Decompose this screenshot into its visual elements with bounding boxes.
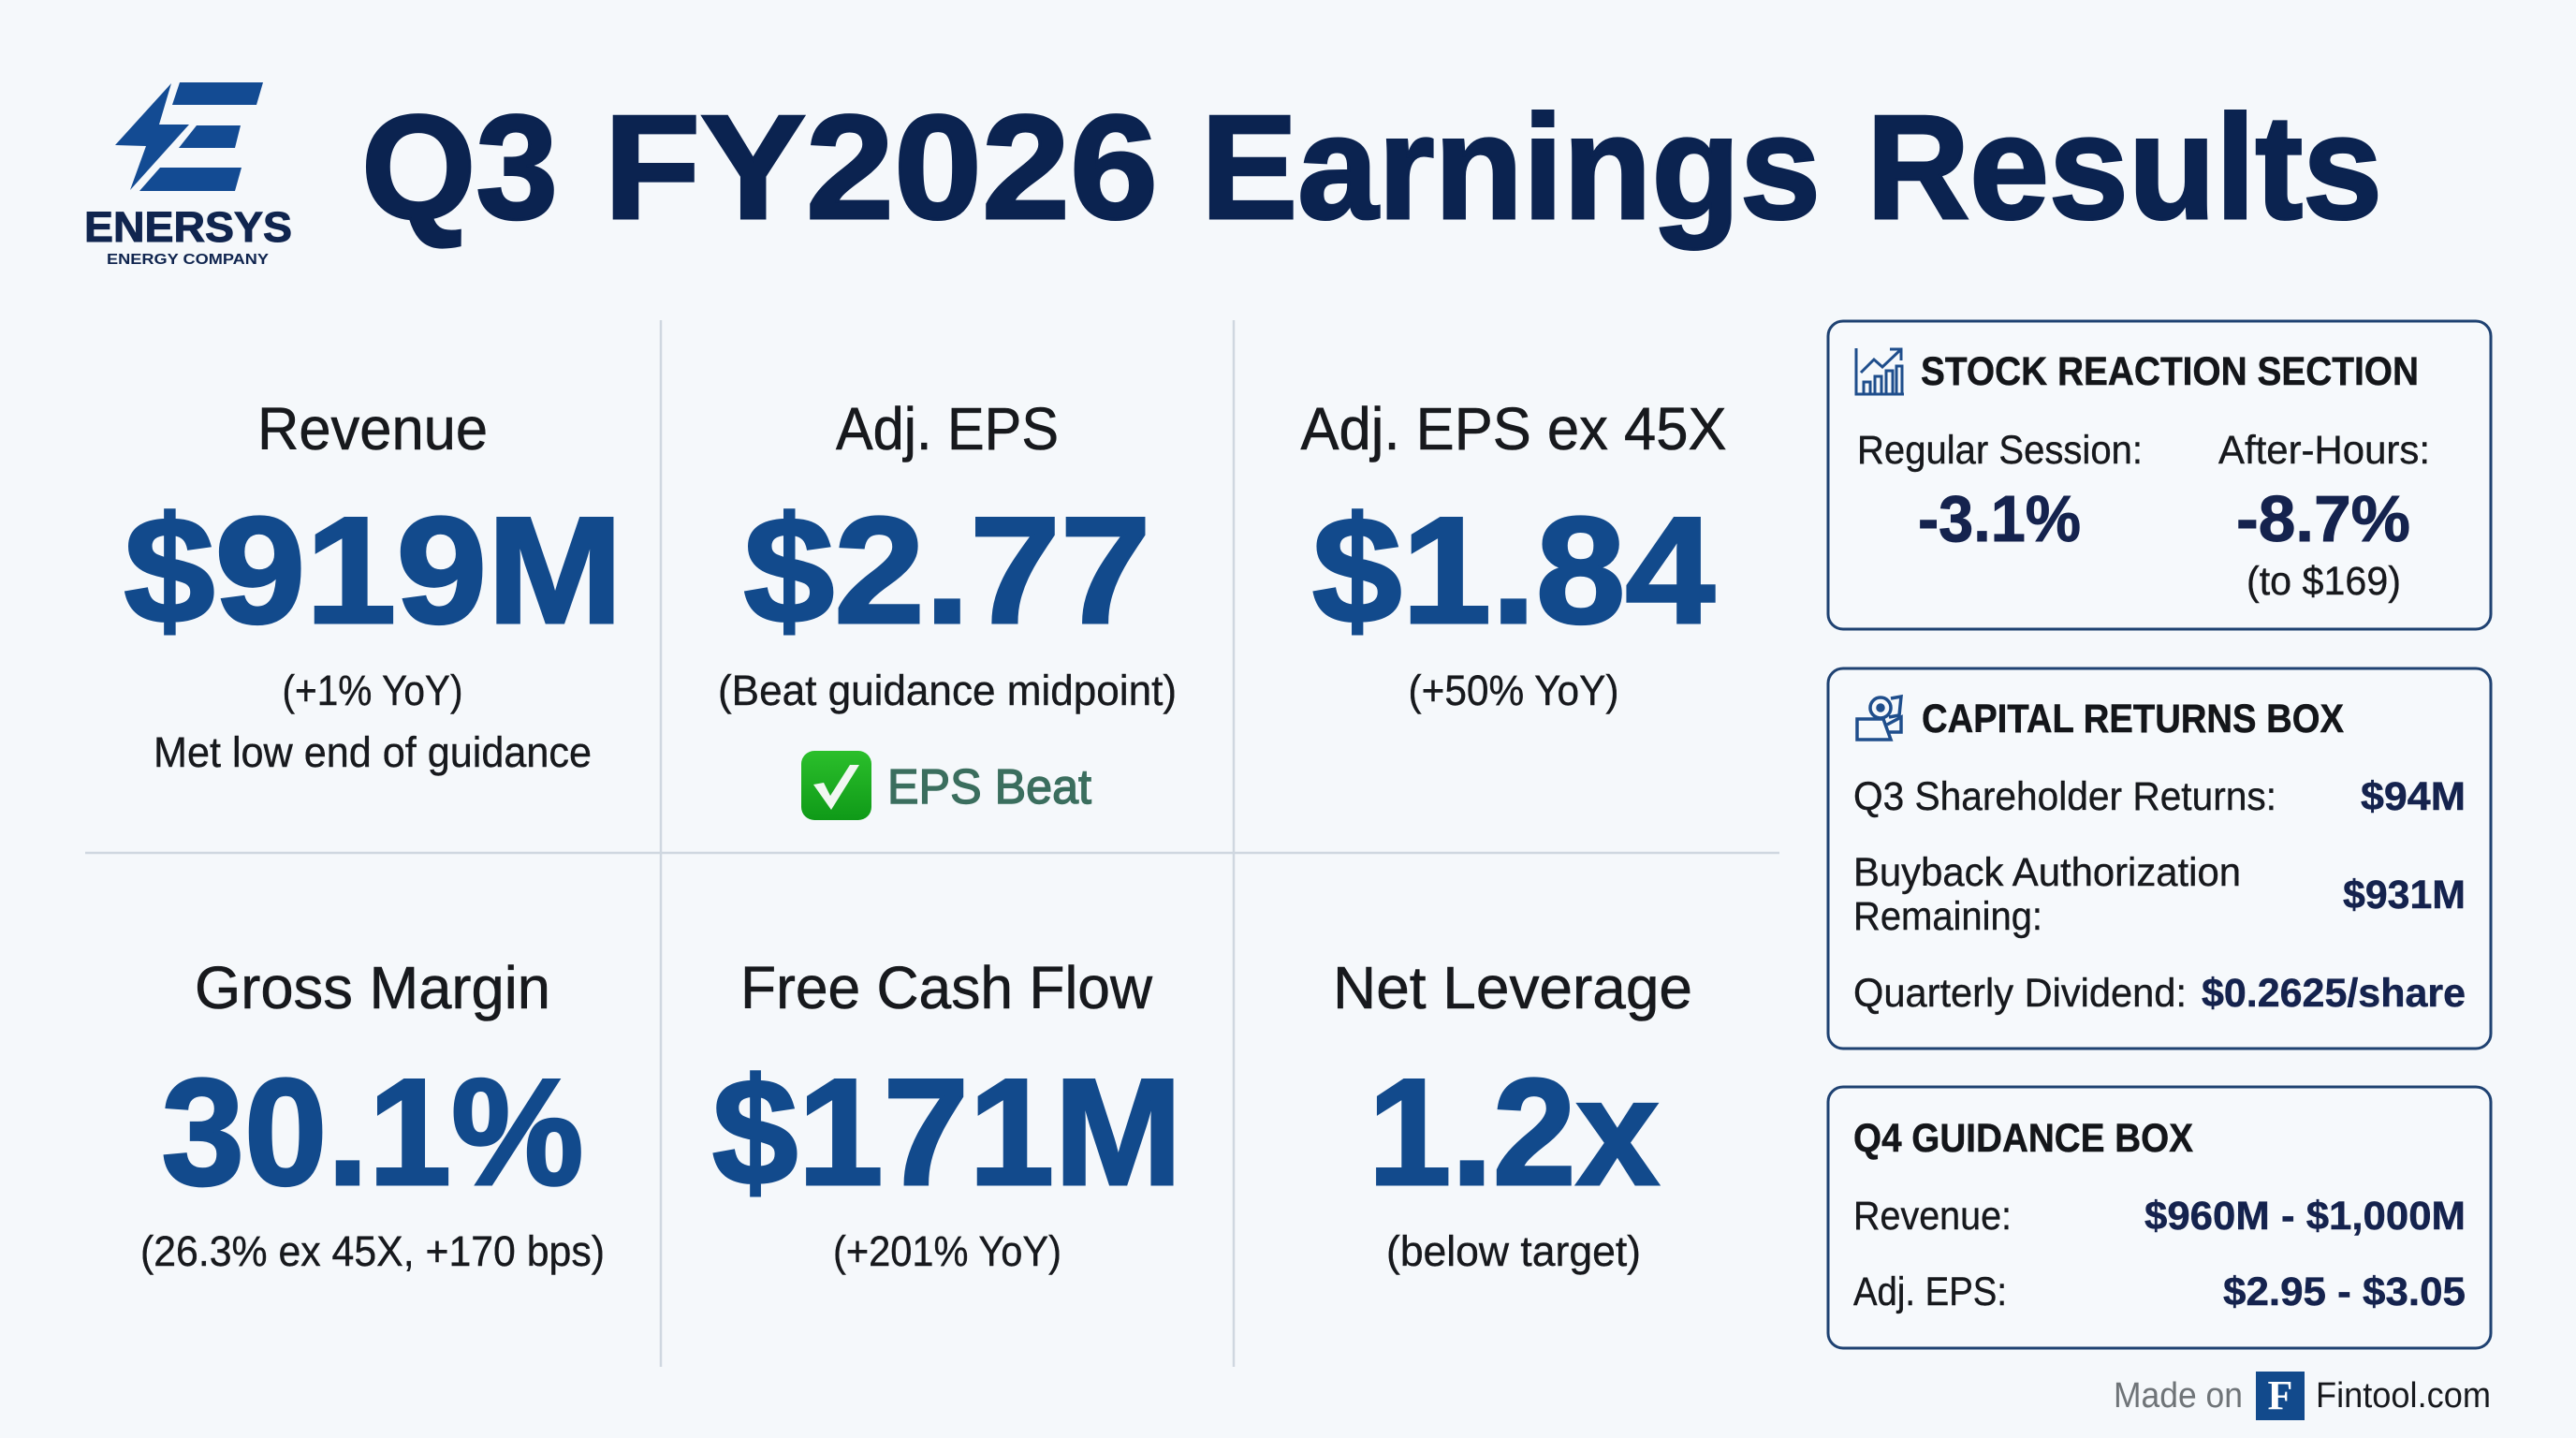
after-hours price: (to $169) xyxy=(2247,559,2401,604)
net leverage value: 1.2x xyxy=(1368,1048,1659,1217)
title: Q3 xyxy=(361,85,558,250)
free cash flow value: $171M xyxy=(712,1048,1182,1217)
footer: Fintool credit xyxy=(2114,1372,2491,1420)
icon: lightning E mark xyxy=(115,82,263,191)
panel: free cash flow metric xyxy=(712,954,1182,1275)
adjusted EPS value: $2.77 xyxy=(743,486,1151,655)
stock reaction heading: STOCK REACTION SECTION xyxy=(1921,349,2419,394)
buyback label xyxy=(1853,850,2241,939)
EPS beat badge text: EPS Beat xyxy=(887,760,1092,814)
guidance revenue label: Revenue: xyxy=(1853,1194,2012,1239)
dividend value: $0.2625/share xyxy=(2202,971,2466,1016)
Fintool.com text: Fintool.com xyxy=(2316,1376,2491,1416)
revenue label: Revenue xyxy=(257,395,488,462)
gross margin note: (26.3% ex 45X, +170 bps) xyxy=(140,1227,605,1275)
logo: Enersys xyxy=(84,82,292,268)
shareholder returns label: Q3 Shareholder Returns: xyxy=(1853,774,2276,819)
net leverage note: (below target) xyxy=(1386,1227,1641,1275)
revenue note: Met low end of guidance xyxy=(154,728,592,776)
net leverage label: Net Leverage xyxy=(1333,954,1692,1021)
guidance EPS value: $2.95 - $3.05 xyxy=(2223,1269,2466,1314)
free cash flow change: (+201% YoY) xyxy=(833,1227,1061,1275)
Q4 guidance heading: Q4 GUIDANCE BOX xyxy=(1853,1116,2193,1161)
adjusted EPS note: (Beat guidance midpoint) xyxy=(718,667,1177,714)
title: FY2026 xyxy=(604,85,1158,250)
made on text: Made on xyxy=(2114,1376,2243,1416)
panel: stock reaction xyxy=(1828,321,2491,629)
free cash flow label: Free Cash Flow xyxy=(740,954,1153,1021)
panel: net leverage metric xyxy=(1333,954,1692,1275)
panel: revenue metric xyxy=(124,395,623,776)
icon: Fintool logo: F xyxy=(2268,1372,2292,1418)
buyback value: $931M xyxy=(2343,873,2466,917)
guidance EPS label: Adj. EPS: xyxy=(1853,1269,2007,1314)
icon: Fintool logo xyxy=(2256,1372,2305,1420)
buyback label: Remaining: xyxy=(1853,894,2042,939)
buyback label: Buyback Authorization xyxy=(1853,850,2241,895)
capital returns heading: CAPITAL RETURNS BOX xyxy=(1922,697,2344,741)
regular session change: -3.1% xyxy=(1918,482,2081,555)
title: Earnings xyxy=(1201,85,1821,250)
gross margin value: 30.1% xyxy=(161,1048,584,1217)
gross margin label: Gross Margin xyxy=(195,954,550,1021)
logo wordmark: ENERSYS xyxy=(84,203,292,251)
panel: capital returns xyxy=(1828,668,2491,1049)
icon: green check mark xyxy=(801,751,871,820)
panel: gross margin metric xyxy=(140,954,605,1275)
icon: coin and wallet xyxy=(1857,697,1901,740)
adjusted EPS ex 45X value: $1.84 xyxy=(1312,486,1715,655)
after-hours change: -8.7% xyxy=(2236,482,2410,555)
after-hours label: After-Hours: xyxy=(2218,428,2430,473)
panel: Q4 guidance xyxy=(1828,1087,2491,1348)
panel: adjusted EPS metric xyxy=(718,395,1177,820)
regular session label: Regular Session: xyxy=(1857,428,2143,473)
icon: rising bar chart xyxy=(1856,348,1904,394)
adjusted EPS label: Adj. EPS xyxy=(836,395,1059,462)
logo tagline: ENERGY COMPANY xyxy=(107,252,269,268)
panel: adjusted EPS ex 45X metric xyxy=(1301,395,1726,714)
title: Results xyxy=(1866,85,2382,250)
guidance revenue value: $960M - $1,000M xyxy=(2144,1194,2466,1239)
shareholder returns value: $94M xyxy=(2361,774,2466,819)
adjusted EPS ex 45X change: (+50% YoY) xyxy=(1408,667,1619,714)
revenue value: $919M xyxy=(124,486,623,655)
adjusted EPS ex 45X label: Adj. EPS ex 45X xyxy=(1301,395,1726,462)
dividend label: Quarterly Dividend: xyxy=(1853,971,2187,1016)
revenue change: (+1% YoY) xyxy=(283,667,462,714)
